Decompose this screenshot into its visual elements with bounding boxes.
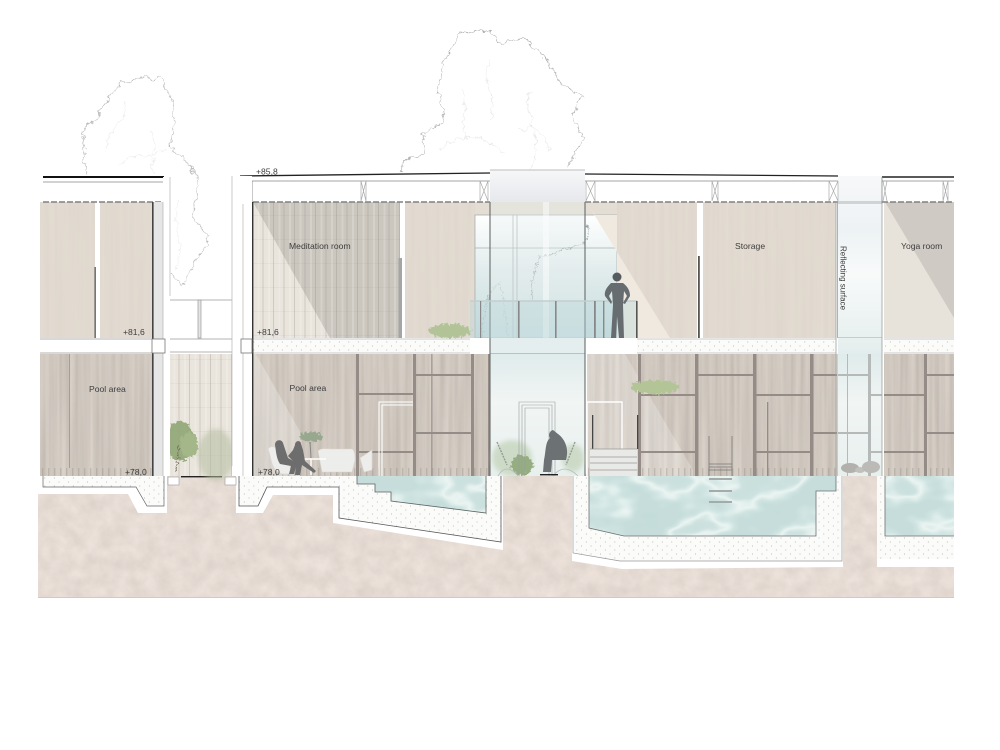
balcony railing [470, 301, 638, 338]
seated people [275, 440, 316, 475]
courtyard screen [170, 354, 234, 481]
label: +85,8: +85,8 [256, 166, 278, 176]
left roof [43, 177, 164, 202]
underwater ladder rungs [709, 478, 732, 503]
window with view [475, 202, 617, 338]
wall frames [356, 354, 490, 476]
ground: sand [38, 476, 954, 597]
upper wall left [40, 202, 152, 338]
stair block [587, 402, 638, 476]
plants at atrium base [492, 440, 584, 476]
upper wall yoga room [884, 202, 954, 338]
pool edge: stepped [357, 476, 486, 513]
pool water: stepped [357, 475, 486, 513]
tree outline left [84, 78, 210, 286]
foundation left [38, 474, 167, 513]
label: pool area left: Pool area [89, 384, 126, 394]
label: reflecting surface: Reflecting surface [838, 246, 848, 311]
roof and structural frame [43, 173, 954, 340]
column left [152, 177, 170, 476]
label: +78,0 centre: +78,0 [258, 467, 280, 477]
table [296, 459, 326, 475]
plant: hanging shrub [631, 380, 679, 394]
label: meditation room: Meditation room [289, 241, 351, 251]
plant: balcony shrub [429, 324, 471, 338]
lower wood wall left [40, 354, 152, 476]
glass atrium [490, 170, 585, 476]
label: +81,6 centre: +81,6 [257, 327, 279, 337]
rear door frame [519, 402, 555, 476]
plant: courtyard tree [166, 421, 198, 472]
seated group: sofa, table and tree [268, 432, 372, 475]
label: +81,6 left: +81,6 [123, 327, 145, 337]
plant on terrace [299, 432, 323, 442]
label: yoga room: Yoga room [901, 241, 942, 251]
centre roof [240, 173, 490, 340]
pool ladder [709, 436, 732, 476]
building section drawing [38, 29, 954, 598]
upper wall right [587, 202, 836, 338]
ground line [38, 597, 954, 598]
upper wall centre [405, 202, 475, 338]
tree seen through window [482, 225, 588, 338]
column right of storage [836, 202, 882, 476]
foundation centre with stepped pool [236, 474, 503, 550]
gravel strip and footing details [168, 476, 236, 485]
stones [841, 461, 880, 473]
pool edge: large [589, 472, 842, 536]
upper wall meditation room [253, 202, 405, 338]
lower wood wall right [587, 354, 838, 476]
lower wood wall centre [253, 354, 490, 476]
lower wood wall far right [884, 354, 954, 476]
label: storage: Storage [735, 241, 765, 251]
foundation right with large pool [572, 472, 843, 569]
wall frames [638, 354, 837, 476]
far right roof [882, 177, 954, 204]
door frame [379, 402, 413, 476]
white sofas [268, 447, 372, 474]
person standing on balcony [605, 272, 630, 338]
tree outline large [400, 30, 582, 173]
pool water: large [589, 475, 836, 536]
reflecting column [838, 176, 882, 476]
pool water: far right [885, 475, 954, 536]
label: +78,0 left: +78,0 [125, 467, 147, 477]
label: pool area centre: Pool area [290, 383, 327, 393]
person seated in atrium [497, 430, 578, 476]
column centre [232, 176, 253, 476]
foundation far right with pool [877, 474, 954, 567]
right roof [585, 174, 838, 202]
courtyard bridge [170, 300, 232, 352]
floor slabs [40, 338, 954, 353]
